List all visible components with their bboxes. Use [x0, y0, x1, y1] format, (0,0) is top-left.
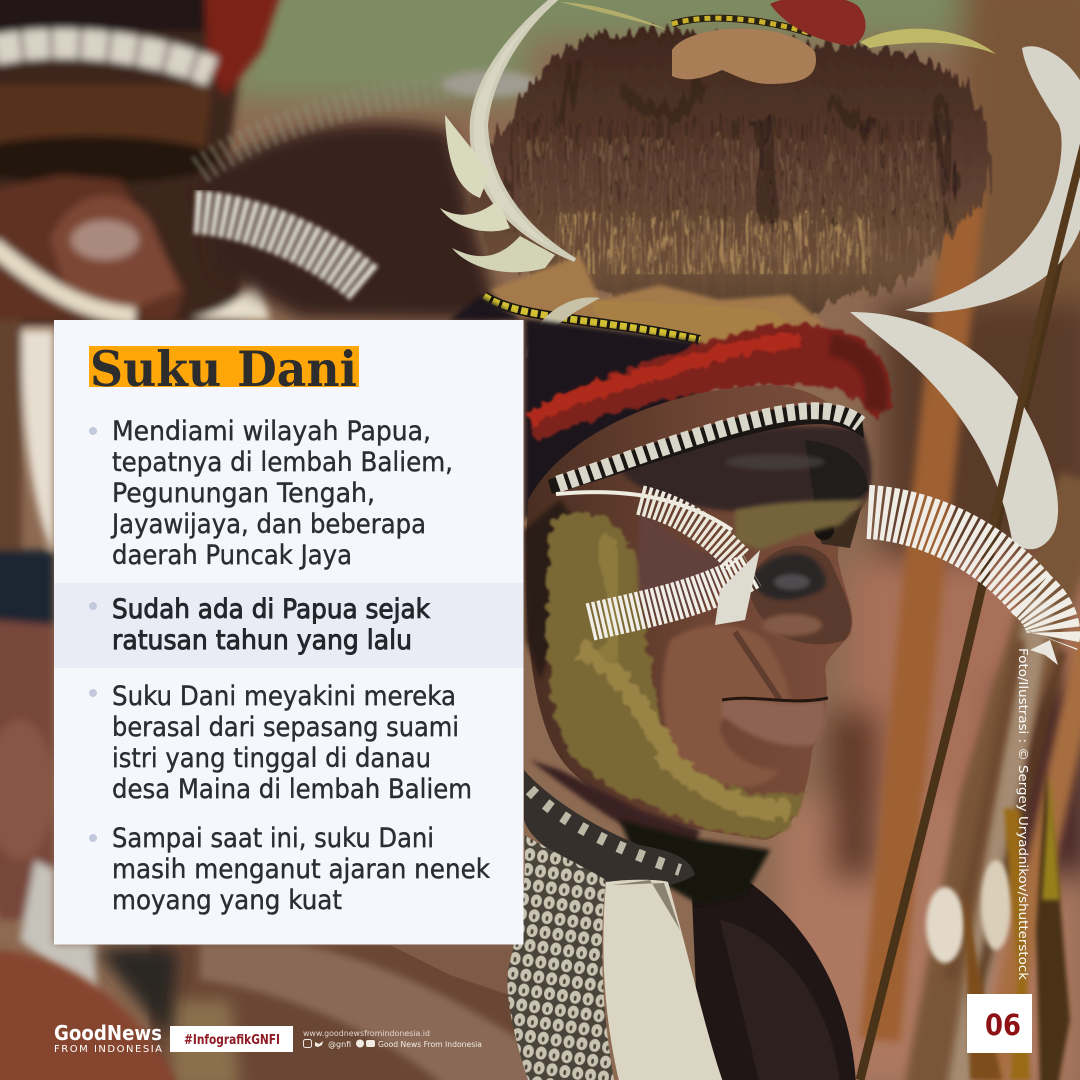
- social links: Good News From Indonesia: [378, 1040, 482, 1049]
- icon: instagram and twitter: [304, 1040, 323, 1048]
- bullet: wilayah: Pegunungan Tengah,: [112, 478, 375, 509]
- dark painted forehead: [620, 426, 872, 511]
- bullet: asal-usul: desa Maina di lembah Baliem: [112, 774, 472, 805]
- woven cap: [672, 28, 816, 84]
- feathers on the face: [556, 492, 760, 625]
- face: [524, 385, 872, 860]
- blurred man on the left: [0, 0, 282, 1000]
- bullet: asal-usul: Suku Dani meyakini mereka: [112, 681, 456, 712]
- page number badge: [967, 994, 1032, 1053]
- blurred backdrop tones: [230, 0, 1080, 1080]
- bullet: kepercayaan: moyang yang kuat: [112, 885, 342, 916]
- cowrie shell vest: [507, 835, 614, 1080]
- footer logo: [54, 1021, 162, 1055]
- right feather: [868, 512, 1058, 665]
- bullet: asal-usul: berasal dari sepasang suami: [112, 712, 459, 743]
- social links: www.goodnewsfromindonesia.id: [303, 1029, 430, 1038]
- page number badge: 06: [985, 1008, 1021, 1042]
- bullet: asal-usul: [89, 681, 472, 805]
- hat base and beaded strip: [484, 255, 825, 345]
- bone crescents left of hat: [440, 0, 600, 358]
- yellow brow: [735, 500, 866, 550]
- hashtag badge: [170, 1026, 293, 1052]
- bullet: wilayah: Jayawijaya, dan beberapa: [110, 509, 426, 540]
- eye: [812, 505, 862, 548]
- bullet: wilayah: daerah Puncak Jaya: [112, 540, 352, 571]
- temple shadow: [524, 500, 575, 680]
- bullet: sejarah: ratusan tahun yang lalu: [112, 625, 412, 656]
- footer logo: GoodNews: [54, 1021, 162, 1045]
- yellow plume top right: [860, 29, 996, 54]
- bullet: wilayah: Mendiami wilayah Papua,: [112, 416, 431, 447]
- shoulder and neck ornaments: [507, 770, 856, 1080]
- yellow painted beard: [547, 512, 806, 838]
- bullet: wilayah: tepatnya di lembah Baliem,: [112, 447, 453, 478]
- mouth: [722, 699, 825, 746]
- palm frond and dark fur behind: [195, 71, 538, 320]
- highlighted row: [54, 583, 524, 668]
- background spears: [860, 170, 1080, 1080]
- bullet: kepercayaan: masih menganut ajaran nenek: [112, 854, 491, 885]
- tooth band: [548, 405, 864, 494]
- bone ornaments right: [850, 46, 1080, 560]
- footer logo: FROM INDONESIA: [54, 1044, 162, 1055]
- lower left blurred foreground: [0, 944, 590, 1080]
- red tuft top: [770, 0, 866, 46]
- nose: [750, 546, 851, 644]
- fur headdress: [470, 0, 996, 330]
- tusk bib: [603, 880, 724, 1080]
- bullet: wilayah: [89, 416, 453, 571]
- bullet: asal-usul: istri yang tinggal di danau: [112, 743, 431, 774]
- social links: @gnfi: [328, 1040, 351, 1049]
- bullet: kepercayaan: Sampai saat ini, suku Dani: [112, 823, 434, 854]
- bullet: sejarah: Sudah ada di Papua sejak: [112, 594, 431, 625]
- cheek wrinkled: [662, 625, 790, 787]
- social links: [303, 1029, 482, 1049]
- bullet: sejarah: [89, 594, 431, 656]
- title: Suku Dani: [90, 340, 357, 398]
- hashtag badge: #InfografikGNFI: [184, 1032, 280, 1048]
- icon: facebook and youtube: [356, 1040, 375, 1048]
- credit text: Foto/Ilustrasi : © Sergey Uryadnikov/shutterstock: [1016, 648, 1031, 981]
- bullet: kepercayaan: [89, 823, 491, 916]
- panel: facts about Suku Dani: [54, 320, 524, 944]
- hair and red band: [450, 296, 891, 520]
